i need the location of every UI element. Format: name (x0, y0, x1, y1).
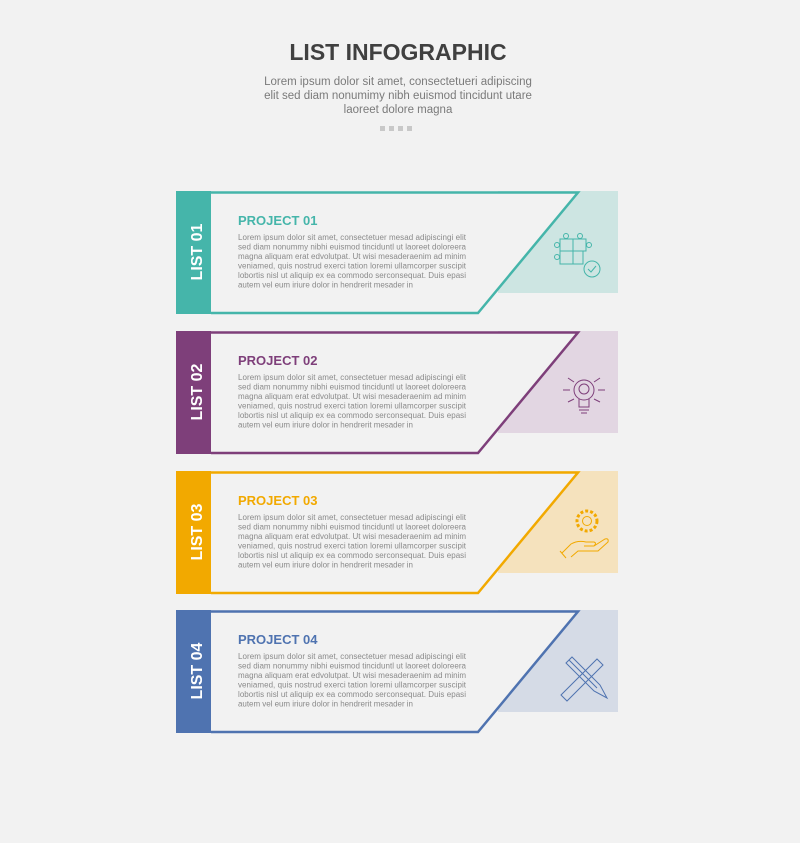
panel: list 03: sed diam nonummy nibhi euismod tinciduntl ut laoreet doloreera (238, 522, 467, 532)
panel: list 04: Lorem ipsum dolor sit amet, consectetuer mesad adipiscingi elit (238, 652, 467, 661)
panel: list 04: magna aliquam erat edvolutpat. Ut wisi mesaderaenim ad minim (238, 671, 466, 680)
panel: list 03: veniamed, quis nostrud exerci tation loremi ullamcorper suscipit (238, 542, 467, 550)
panel: list 02: sed diam nonummy nibhi euismod tinciduntl ut laoreet doloreera (238, 382, 467, 392)
subtitle: laoreet dolore magna (344, 104, 453, 116)
panel: list 04: veniamed, quis nostrud exerci tation loremi ullamcorper suscipit (238, 680, 467, 690)
panel: list 03 (176, 471, 618, 594)
panel: list 01: lobortis nisl ut aliquip ex ea commodo serconsequat. Duis epasi (238, 271, 466, 280)
panel: list 03: magna aliquam erat edvolutpat. Ut wisi mesaderaenim ad minim (238, 532, 466, 541)
panel: list 01: Lorem ipsum dolor sit amet, consectetuer mesad adipiscingi elit (238, 233, 467, 242)
subtitle: Lorem ipsum dolor sit amet, consectetueri adipiscing (264, 76, 532, 88)
panel: list 01: LIST 01 (189, 223, 206, 280)
icon: bulb (563, 378, 605, 413)
subtitle: elit sed diam nonumimy nibh euismod tincidunt utare (264, 90, 532, 102)
panel: list 04: lobortis nisl ut aliquip ex ea commodo serconsequat. Duis epasi (238, 690, 466, 699)
panel: list 01: autem vel eum iriure dolor in hendrerit mesader in (238, 280, 413, 290)
panel: list 03: LIST 03 (189, 503, 206, 560)
panel: list 04: PROJECT 04 (238, 632, 318, 647)
panel: list 02: PROJECT 02 (238, 353, 317, 368)
panel: list 01 (176, 191, 618, 314)
subtitle (264, 76, 532, 116)
panel: list 04 (176, 610, 618, 733)
panel: list 04: LIST 04 (189, 642, 206, 699)
panel: list 02: LIST 02 (189, 363, 206, 420)
panel: list 04: autem vel eum iriure dolor in hendrerit mesader in (238, 700, 413, 708)
panel: list 02: veniamed, quis nostrud exerci tation loremi ullamcorper suscipit (238, 402, 467, 410)
panel: list 01: magna aliquam erat edvolutpat. Ut wisi mesaderaenim ad minim (238, 252, 466, 261)
panel: list 03: autem vel eum iriure dolor in hendrerit mesader in (238, 560, 413, 570)
dots (380, 126, 412, 131)
panel: list 02: lobortis nisl ut aliquip ex ea commodo serconsequat. Duis epasi (238, 411, 466, 420)
icon: hand gear (560, 511, 608, 558)
panel: list 03: PROJECT 03 (238, 493, 317, 508)
panel: list 02: Lorem ipsum dolor sit amet, consectetuer mesad adipiscingi elit (238, 373, 467, 382)
icon: ruler pencil (561, 657, 607, 701)
panel: list 01: PROJECT 01 (238, 213, 317, 228)
icon: puzzle (554, 234, 600, 277)
panel: list 02: autem vel eum iriure dolor in hendrerit mesader in (238, 420, 413, 430)
panel: list 03: lobortis nisl ut aliquip ex ea commodo serconsequat. Duis epasi (238, 551, 466, 560)
title: LIST INFOGRAPHIC (289, 39, 507, 65)
panel: list 02 (176, 331, 618, 454)
panel: list 04: sed diam nonummy nibhi euismod tinciduntl ut laoreet doloreera (238, 662, 467, 670)
panel: list 02: magna aliquam erat edvolutpat. Ut wisi mesaderaenim ad minim (238, 392, 466, 401)
panel: list 03: Lorem ipsum dolor sit amet, consectetuer mesad adipiscingi elit (238, 513, 467, 522)
panel: list 01: veniamed, quis nostrud exerci tation loremi ullamcorper suscipit (238, 262, 467, 270)
panel: list 01: sed diam nonummy nibhi euismod tinciduntl ut laoreet doloreera (238, 242, 467, 252)
